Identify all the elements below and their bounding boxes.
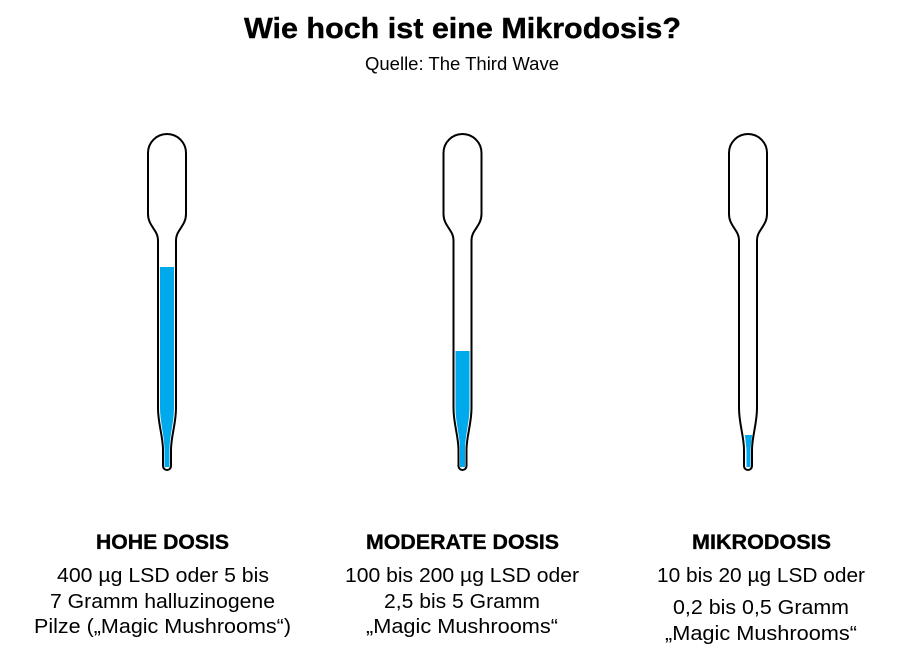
description: moderate dose: 100 bis 200 µg LSD oder bbox=[345, 565, 579, 587]
heading: moderate dose: MODERATE DOSIS bbox=[366, 531, 559, 554]
description: moderate dose: „Magic Mushrooms“ bbox=[366, 616, 558, 638]
pipette outline: microdose bbox=[729, 134, 767, 470]
heading: microdose: MIKRODOSIS bbox=[692, 531, 831, 554]
pipette: high dose bbox=[148, 134, 186, 470]
pipette: microdose bbox=[729, 134, 767, 470]
description: microdose: 0,2 bis 0,5 Gramm bbox=[673, 597, 849, 619]
source line: Quelle: The Third Wave bbox=[365, 54, 559, 74]
description: high dose: 7 Gramm halluzinogene bbox=[50, 591, 275, 613]
pipette outline: moderate dose bbox=[444, 134, 482, 470]
label block: high dose bbox=[34, 531, 291, 638]
pipette outline: high dose bbox=[148, 134, 186, 470]
pipette: moderate dose bbox=[444, 134, 482, 470]
heading: high dose: HOHE DOSIS bbox=[96, 531, 229, 554]
description: high dose: 400 µg LSD oder 5 bis bbox=[57, 565, 269, 587]
label block: moderate dose bbox=[345, 531, 579, 638]
description: moderate dose bbox=[345, 565, 579, 638]
liquid: moderate dose bbox=[456, 351, 470, 467]
description: microdose: „Magic Mushrooms“ bbox=[665, 623, 857, 645]
liquid: microdose bbox=[745, 435, 752, 467]
description: moderate dose: 2,5 bis 5 Gramm bbox=[384, 591, 540, 613]
description: high dose: Pilze („Magic Mushrooms“) bbox=[34, 616, 291, 638]
description: microdose bbox=[657, 565, 865, 645]
label block: microdose bbox=[657, 531, 865, 645]
title: Wie hoch ist eine Mikrodosis? bbox=[244, 13, 681, 45]
liquid: high dose bbox=[160, 267, 174, 467]
description: microdose: 10 bis 20 µg LSD oder bbox=[657, 565, 865, 587]
description: high dose bbox=[34, 565, 291, 638]
